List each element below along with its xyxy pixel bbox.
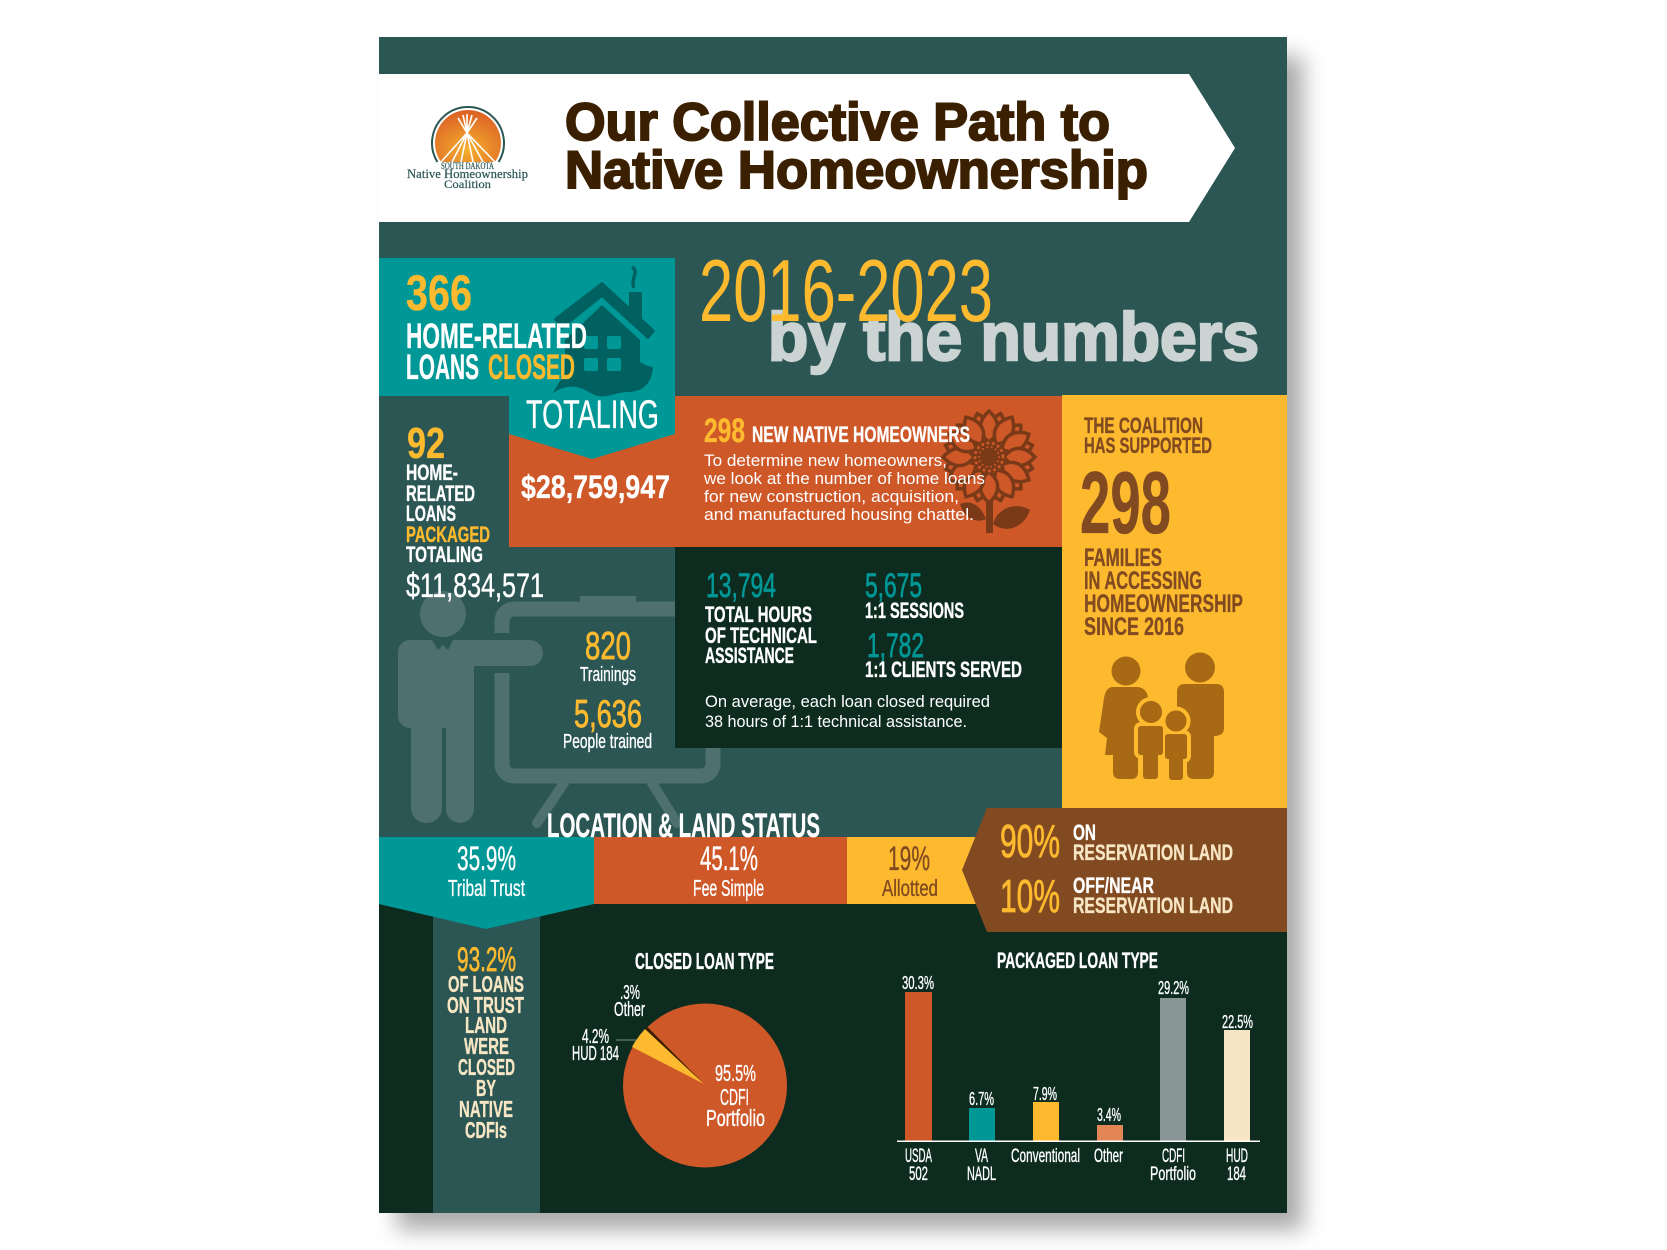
dark technical assistance panel background bbox=[675, 547, 1062, 748]
stat: 92 loans packaged: TOTALING bbox=[406, 542, 483, 567]
icon: family bbox=[1099, 652, 1224, 780]
text: technical assistance stats: 13,794 bbox=[706, 567, 776, 605]
stat: 366 loans closed: CLOSED bbox=[488, 348, 575, 387]
text: 93.2% of loans on trust land: ON TRUST bbox=[447, 992, 524, 1018]
pie chart: closed loan type: .3% bbox=[620, 982, 640, 1004]
bar chart: packaged loan type: HUD bbox=[1226, 1146, 1248, 1167]
text: new native homeowners: we look at the number of home loans bbox=[703, 469, 985, 488]
bar chart: packaged loan type: Other bbox=[1094, 1146, 1123, 1167]
page drop shadow bbox=[397, 56, 1303, 1230]
title text: Our Collective Path to bbox=[565, 93, 1110, 152]
closed total amount: $28,759,947 bbox=[521, 469, 670, 505]
stat: 366 loans closed: LOANS bbox=[406, 348, 479, 387]
text: 93.2% of loans on trust land: OF LOANS bbox=[448, 971, 524, 997]
text: coalition has supported 298 families: SINCE 2016 bbox=[1084, 613, 1184, 641]
text: technical assistance stats: 1:1 CLIENTS SERVED bbox=[865, 657, 1022, 682]
land status: fee simple bbox=[594, 837, 847, 904]
bar chart: packaged loan type: 6.7% bbox=[969, 1089, 994, 1109]
stat: trainings bbox=[563, 625, 652, 753]
text: coalition has supported 298 families: THE COALITION bbox=[1084, 413, 1203, 438]
text: coalition has supported 298 families: FAMILIES bbox=[1084, 544, 1162, 572]
text: technical assistance stats: On average, each loan closed required bbox=[705, 692, 990, 711]
totaling label: TOTALING bbox=[526, 393, 659, 437]
stat: 92 loans packaged bbox=[406, 419, 544, 605]
stat: 366 loans closed bbox=[406, 265, 587, 387]
pie chart: closed loan type: Other bbox=[614, 999, 645, 1021]
text: technical assistance stats: 1:1 SESSIONS bbox=[865, 598, 964, 623]
icon: sunflower bbox=[943, 411, 1035, 533]
bar chart: packaged loan type: 184 bbox=[1227, 1164, 1246, 1185]
stat: trainings: Trainings bbox=[580, 664, 636, 686]
text: 93.2% of loans on trust land: CDFIs bbox=[465, 1117, 507, 1143]
bar chart: packaged loan type: 29.2% bbox=[1158, 978, 1189, 998]
land status: allotted: 19% bbox=[888, 840, 930, 878]
callout: reservation land bbox=[962, 808, 1287, 932]
stat: trainings: 820 bbox=[585, 625, 631, 668]
text: 93.2% of loans on trust land bbox=[447, 941, 524, 1143]
bar chart: packaged loan type: 30.3% bbox=[902, 973, 934, 993]
yellow panel background bbox=[1062, 395, 1287, 808]
land status: tribal trust: Tribal Trust bbox=[448, 875, 525, 901]
text: new native homeowners: and manufactured housing chattel. bbox=[704, 505, 974, 524]
logo: SOUTH DAKOTA bbox=[441, 161, 494, 171]
heading: by the numbers: by the numbers bbox=[768, 299, 1259, 375]
callout: reservation land: OFF/NEAR bbox=[1073, 873, 1154, 898]
stat: 92 loans packaged: HOME- bbox=[406, 460, 458, 485]
bar chart: packaged loan type: Conventional bbox=[1011, 1146, 1080, 1167]
text: new native homeowners: for new construction, acquisition, bbox=[704, 487, 959, 506]
text: new native homeowners: To determine new homeowners, bbox=[704, 451, 947, 470]
presenter figure icon bbox=[398, 591, 543, 823]
text: technical assistance stats: 1,782 bbox=[867, 627, 924, 665]
stat: trainings: 5,636 bbox=[574, 693, 642, 736]
stat: 92 loans packaged: $11,834,571 bbox=[406, 567, 544, 605]
background panel bbox=[379, 37, 1287, 1213]
heading: closed loan type: CLOSED LOAN TYPE bbox=[635, 948, 774, 974]
stat: 92 loans packaged: PACKAGED bbox=[406, 522, 490, 547]
land status: allotted bbox=[847, 837, 987, 904]
land status: fee simple: 45.1% bbox=[700, 840, 758, 878]
bar chart: packaged loan type bbox=[897, 948, 1260, 1185]
callout: reservation land: RESERVATION LAND bbox=[1073, 840, 1233, 865]
stat: trainings: People trained bbox=[563, 731, 652, 753]
text: 93.2% of loans on trust land: WERE bbox=[464, 1033, 509, 1059]
callout: reservation land: ON bbox=[1073, 820, 1096, 845]
logo: Coalition bbox=[444, 177, 491, 191]
stat: 92 loans packaged: LOANS bbox=[406, 501, 456, 526]
text: coalition has supported 298 families: 298 bbox=[1080, 453, 1171, 552]
land status: allotted: Allotted bbox=[882, 875, 938, 901]
dark bottom section background bbox=[379, 904, 1287, 1213]
pie chart: closed loan type: CDFI bbox=[720, 1084, 749, 1110]
bar chart: packaged loan type: NADL bbox=[967, 1164, 996, 1185]
land status: tribal trust: 35.9% bbox=[457, 840, 516, 878]
pie chart: closed loan type: Portfolio bbox=[706, 1105, 765, 1131]
text: technical assistance stats bbox=[705, 567, 1022, 731]
stat: 366 loans closed: 366 bbox=[406, 265, 472, 321]
bar chart: packaged loan type: USDA bbox=[905, 1146, 932, 1167]
bar chart: packaged loan type: 502 bbox=[909, 1164, 928, 1185]
stat: 92 loans packaged: 92 bbox=[407, 419, 445, 468]
bar chart: packaged loan type: 3.4% bbox=[1097, 1105, 1121, 1125]
bar chart: packaged loan type: CDFI bbox=[1162, 1146, 1185, 1167]
stat: 366 loans closed: HOME-RELATED bbox=[406, 317, 587, 356]
land status: tribal trust bbox=[379, 837, 594, 929]
orange panel background bbox=[509, 396, 1062, 547]
text: 93.2% of loans on trust land: BY bbox=[476, 1075, 496, 1101]
text: technical assistance stats: 5,675 bbox=[865, 567, 922, 605]
title banner bbox=[379, 74, 1235, 222]
text: technical assistance stats: 38 hours of 1:1 technical assistance. bbox=[705, 712, 967, 731]
text: technical assistance stats: ASSISTANCE bbox=[705, 643, 794, 668]
land status: fee simple: Fee Simple bbox=[693, 875, 764, 901]
pie chart: closed loan type: 4.2% bbox=[582, 1026, 609, 1048]
stat: 92 loans packaged: RELATED bbox=[406, 481, 475, 506]
logo: Native Homeownership bbox=[407, 167, 528, 181]
icon: house bbox=[553, 267, 654, 396]
text: technical assistance stats: OF TECHNICAL bbox=[705, 623, 817, 648]
bar chart: packaged loan type: 22.5% bbox=[1222, 1012, 1253, 1032]
text: 93.2% of loans on trust land: 93.2% bbox=[457, 941, 516, 979]
title text: Native Homeownership bbox=[565, 141, 1148, 200]
text: 93.2% of loans on trust land: NATIVE bbox=[459, 1096, 513, 1122]
text: new native homeowners bbox=[703, 412, 985, 524]
heading: packaged loan type: PACKAGED LOAN TYPE bbox=[997, 948, 1158, 973]
heading: 2016-2023: 2016-2023 bbox=[699, 241, 993, 340]
text: new native homeowners: 298 bbox=[704, 412, 745, 450]
text: 93.2% of loans on trust land: LAND bbox=[465, 1012, 507, 1038]
text: technical assistance stats: TOTAL HOURS bbox=[705, 602, 812, 627]
bar chart: packaged loan type: Portfolio bbox=[1150, 1164, 1196, 1185]
text: coalition has supported 298 families: HAS SUPPORTED bbox=[1084, 433, 1212, 458]
pie chart: closed loan type: 95.5% bbox=[715, 1060, 756, 1086]
logo bbox=[407, 107, 528, 191]
bar chart: packaged loan type: VA bbox=[975, 1146, 988, 1167]
text: coalition has supported 298 families: IN ACCESSING bbox=[1084, 567, 1202, 595]
column: loans on trust land background bbox=[433, 904, 540, 1213]
text: coalition has supported 298 families: HOMEOWNERSHIP bbox=[1084, 590, 1243, 618]
callout: reservation land: 90% bbox=[1000, 815, 1060, 867]
text: 93.2% of loans on trust land: CLOSED bbox=[458, 1054, 515, 1080]
title text bbox=[565, 93, 1148, 200]
pie chart: closed loan type: HUD 184 bbox=[572, 1043, 619, 1065]
pie chart: closed loan type bbox=[572, 948, 787, 1168]
text: coalition has supported 298 families bbox=[1080, 413, 1243, 641]
callout: reservation land: 10% bbox=[1000, 870, 1060, 922]
presentation board icon bbox=[502, 596, 713, 823]
bar chart: packaged loan type: 7.9% bbox=[1033, 1084, 1057, 1104]
text: new native homeowners: NEW NATIVE HOMEOWNERS bbox=[752, 422, 970, 447]
callout: reservation land: RESERVATION LAND bbox=[1073, 893, 1233, 918]
heading: location and land status: LOCATION & LAND STATUS bbox=[547, 807, 820, 845]
teal loans panel background bbox=[379, 258, 675, 459]
